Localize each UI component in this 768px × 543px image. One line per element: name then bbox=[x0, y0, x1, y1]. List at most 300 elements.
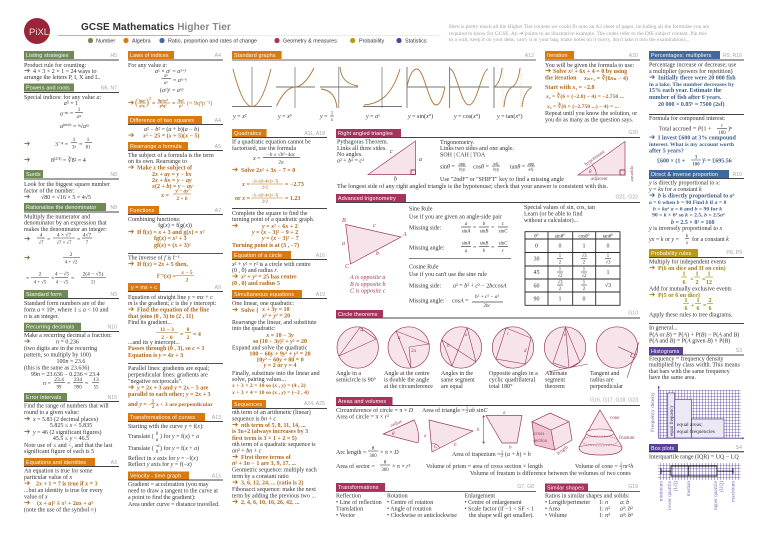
panel: equation of a circle: (0 , 0) and radius 5 bbox=[232, 280, 280, 287]
panel: transformations of curves: 0 bbox=[156, 432, 159, 437]
panel: right angled triangles: Links two sides and one angle. bbox=[440, 146, 514, 152]
panel: transformations: • Line of reflection bbox=[336, 499, 382, 506]
panel: similar shapes: 1: n³ bbox=[599, 513, 610, 519]
panel: equations and identities: Equations and identities bbox=[26, 460, 86, 466]
panel: functions: 2 bbox=[186, 278, 189, 284]
panel: advanced trigonometry: a² = b² + c² − 2bccosA bbox=[453, 284, 507, 290]
graph: y = sin x bbox=[407, 67, 445, 120]
panel: functions: Functions bbox=[130, 208, 155, 214]
title: GCSE Mathematics Higher Tier bbox=[81, 22, 231, 33]
diagram: pythagoras triangle: b bbox=[394, 176, 397, 182]
panel: simultaneous equations: Solve { bbox=[241, 308, 259, 314]
panel: y = mx + c: Equation of straight line y = mx + c bbox=[128, 294, 213, 301]
panel: percentages: Initially there were 20 000 fish bbox=[658, 76, 736, 82]
panel: sequences: first term is 3 × 1 + 2 = 5) bbox=[232, 435, 297, 442]
panel: recurring decimals: 99n = 23.636 − 0.236 = 23.4 bbox=[31, 372, 100, 378]
panel: difference of two squares: a² − b² = (a + b)(a − b) bbox=[144, 126, 199, 133]
panel: iteration: A20 bbox=[629, 53, 638, 59]
panel: powers and roots: Powers and roots bbox=[26, 86, 70, 92]
panel: y = mx + c: that joins (0 , 3) to (2 , 11) bbox=[128, 313, 193, 320]
panel: transformations: Reflection bbox=[336, 492, 361, 500]
panel: areas and volumes: 1 bbox=[501, 450, 503, 454]
panel: transformations of curves bbox=[128, 413, 223, 468]
panel: transformations of curves: ) for y = f(x) + a bbox=[160, 433, 199, 440]
diagram: scalene triangle: C bbox=[345, 264, 350, 270]
panel: iteration: x₂ = ∛(6 × (−2.8) − 4) = −2.750 ... bbox=[545, 92, 625, 100]
panel: advanced trigonometry: sinA bbox=[462, 230, 470, 234]
panel: y = mx + c: m is the gradient; c is the y intercept: bbox=[128, 301, 217, 307]
legend: strands: Geometry & measures bbox=[283, 38, 337, 44]
panel: right angled triangles: adj bbox=[529, 166, 533, 172]
diagram: prism bbox=[532, 413, 572, 457]
table: special trig values: 0 bbox=[535, 244, 538, 250]
panel: probability rules: P(6 on dice and H on coin) bbox=[658, 265, 726, 272]
diagram: scalene triangle: B is opposite b bbox=[350, 282, 386, 288]
panel: probability rules: = bbox=[703, 303, 707, 309]
panel: powers and roots: 1 bbox=[87, 137, 90, 143]
chart: box plot: (UQ) bbox=[718, 481, 725, 492]
panel: equations and identities: (x + a)² ≡ x² + 2ax + a² bbox=[37, 500, 93, 507]
panel: recurring decimals: = bbox=[85, 381, 89, 387]
panel: right angled triangles bbox=[336, 129, 640, 190]
panel: percentages: 20 000 × 0.85⁶ = 7500 (2sf) bbox=[658, 101, 724, 108]
panel: error intervals: Note use of ≤ and <, and that the last bbox=[24, 442, 113, 449]
panel: advanced trigonometry: without a calculator)... bbox=[524, 217, 579, 224]
table: special trig values: 1 bbox=[559, 268, 562, 272]
panel: percentages: £600 × (1 + bbox=[657, 158, 686, 164]
panel: powers and roots bbox=[24, 84, 119, 164]
panel: percentages: r bbox=[721, 124, 723, 129]
panel: rearrange a formula: Make x the subject of bbox=[137, 166, 193, 172]
diagram: angle in semicircle bbox=[336, 327, 378, 384]
legend: strands: Ratio, proportion and rates of change bbox=[168, 38, 257, 44]
diagram: sector: radius bbox=[390, 420, 403, 429]
diagram: scalene triangle: a bbox=[342, 241, 345, 247]
panel: powers and roots: N6, N7 bbox=[101, 86, 117, 92]
panel: functions: If f(x) = 2x + 5 then, bbox=[137, 261, 189, 268]
graph: y = x squared bbox=[232, 67, 272, 120]
panel: y = mx + c: Find its gradient... bbox=[128, 320, 172, 326]
panel: transformations bbox=[336, 483, 536, 519]
panel: circle theorems: Circle theorems bbox=[338, 312, 378, 318]
panel: quadratics: Turning point is at (3 , −7) bbox=[232, 242, 299, 249]
table: special trig values: 1 bbox=[606, 270, 610, 276]
diagram: alternate segment: e bbox=[564, 333, 567, 338]
panel: standard form: form a × 10ⁿ, where 1 ≤ a < 10 and bbox=[24, 306, 108, 314]
panel: equations and identities: ➔ bbox=[24, 478, 30, 488]
panel: similar shapes: Similar shapes bbox=[547, 486, 584, 492]
panel: rearrange a formula: Rearrange a formula bbox=[130, 144, 182, 150]
panel: powers and roots: = 1 bbox=[69, 101, 78, 107]
panel: rationalise the denominator: 2 bbox=[39, 272, 42, 278]
panel: functions: Combining functions: bbox=[128, 216, 181, 223]
panel: percentages: in a lake. The number decreases by bbox=[649, 82, 734, 88]
panel: surds: N8 bbox=[110, 172, 117, 178]
panel: areas and volumes: × π × D bbox=[380, 450, 399, 456]
panel: powers and roots: = ⁿ√ bbox=[71, 123, 84, 130]
panel: transformations: Translation bbox=[336, 506, 363, 512]
panel: simultaneous equations: A19 bbox=[316, 292, 325, 298]
panel: difference of two squares: Difference of two squares bbox=[130, 118, 194, 124]
panel: powers and roots: (m/n) bbox=[63, 123, 72, 127]
panel: transformations of curves: ) for y = f(x + a) bbox=[160, 445, 199, 452]
graph: y = tan x: y = tan(x°) bbox=[496, 113, 522, 120]
panel: areas and volumes: θ bbox=[384, 460, 387, 466]
table: special trig values: 1 bbox=[607, 254, 610, 259]
panel: laws of indices: ➔ bbox=[128, 98, 134, 107]
panel: percentages: 100 bbox=[692, 162, 700, 168]
panel: recurring decimals: n = 0.236 bbox=[56, 340, 79, 346]
panel: simultaneous equations: x = 10 − 3y bbox=[265, 333, 294, 339]
chart: box plot: maximum bbox=[730, 481, 736, 502]
diagram: labelled trig triangle: adjacent bbox=[591, 177, 608, 182]
panel: sequences: an² + bn + c bbox=[232, 448, 262, 454]
panel: laws of indices: ( bbox=[135, 97, 138, 107]
panel: standard form: n is an integer. bbox=[24, 314, 59, 320]
panel: rationalise the denominator: 7 bbox=[86, 241, 89, 246]
diagram: tangent and radius bbox=[590, 327, 639, 390]
diagram: prism: length bbox=[556, 445, 570, 457]
panel: quadratics: factorised, use the formula bbox=[232, 145, 296, 152]
panel: right angled triangles: Use "2ndF" or "SHIFT" key to find a missing angle bbox=[440, 176, 564, 183]
panel: recurring decimals: ➔ bbox=[24, 336, 30, 346]
panel: laws of indices bbox=[128, 51, 223, 108]
panel: direct and inverse proportion: y is inversely proportional to x bbox=[648, 226, 722, 232]
panel: rationalise the denominator: × bbox=[51, 276, 54, 282]
panel: error intervals: ➔ bbox=[24, 427, 30, 436]
panel: quadratics: turning point of a quadratic graph. bbox=[232, 216, 315, 223]
panel: transformations of curves: Starting with the curve y = f(x): bbox=[128, 423, 204, 430]
panel: y = mx + c: 2 bbox=[152, 405, 155, 410]
panel: advanced trigonometry: b² + c² − a² bbox=[475, 294, 499, 300]
panel: y = mx + c: Equation is y = 4x + 3 bbox=[128, 353, 183, 359]
panel: y = mx + c: = 4 bbox=[193, 332, 201, 338]
panel: quadratics: 2×2 bbox=[262, 186, 268, 190]
panel: standard graphs: A12 bbox=[525, 53, 534, 59]
panel: simultaneous equations: x + 3 × 2 = 10 so (x , y) = (4 , 2) bbox=[231, 382, 306, 389]
panel: probability rules: P8, P9 bbox=[726, 250, 742, 256]
panel: percentages: Formula for compound interest: bbox=[649, 115, 726, 122]
panel: rationalise the denominator: Multiply the numerator and bbox=[24, 214, 90, 220]
panel: areas and volumes: 2 bbox=[466, 410, 468, 414]
diagram: pythagoras triangle: a bbox=[419, 157, 422, 163]
panel: similar shapes bbox=[545, 484, 640, 519]
panel: areas and volumes: 2 bbox=[501, 454, 503, 458]
panel: sequences: nth term of a quadratic sequence is bbox=[232, 441, 316, 448]
graph: y = x cubed bbox=[276, 67, 315, 120]
panel: percentages: 100 bbox=[718, 131, 726, 136]
panel: recurring decimals: 13 bbox=[93, 377, 99, 383]
panel: sequences: Sequences bbox=[234, 402, 262, 408]
panel: simultaneous equations: 10y² − 60y + 80 = 0 bbox=[256, 358, 304, 364]
panel: sequences: A24, A25 bbox=[304, 401, 325, 407]
table: special trig values: √2 bbox=[557, 273, 563, 279]
panel: recurring decimals: Make a recurring decimal a fraction: bbox=[24, 332, 112, 339]
panel: rearrange a formula: y − ay bbox=[174, 188, 189, 194]
panel: iteration: Start with x₁ = −2.8 bbox=[545, 85, 594, 91]
panel: advanced trigonometry: = bbox=[473, 246, 477, 252]
panel: right angled triangles: Trigonometry. bbox=[440, 140, 475, 146]
panel: rearrange a formula: on its own. Rearrange to bbox=[128, 159, 187, 165]
panel: areas and volumes: Area of circle = π × r² bbox=[336, 414, 389, 420]
panel: quadratics: −3+√(3²−4×2×−7) bbox=[252, 180, 279, 184]
panel: difference of two squares: A4 bbox=[215, 118, 221, 124]
panel: quadratics: or x = bbox=[235, 196, 251, 202]
panel: y = mx + c: and y = − bbox=[128, 402, 152, 408]
panel: advanced trigonometry: sinA bbox=[462, 242, 470, 246]
panel: areas and volumes: Volume of cone = bbox=[575, 463, 618, 470]
panel: sequences: 3, 6, 12, 24, ... (ratio is 2) bbox=[241, 480, 303, 486]
panel: similar shapes: a: b bbox=[620, 500, 629, 506]
diagram: alternate segment: Alternate bbox=[545, 371, 568, 377]
panel: powers and roots: −m bbox=[63, 110, 69, 115]
diagram: angles in same segment: Angles in the bbox=[441, 371, 473, 377]
panel: areas and volumes: 1 bbox=[466, 406, 468, 410]
panel: histograms: multiplied by class width. This means bbox=[649, 362, 741, 368]
panel: surds: √80 = √16 × 5 = 4√5 bbox=[41, 194, 91, 201]
panel: direct and inverse proportion: ➔ bbox=[649, 190, 655, 200]
panel: quadratics: = −2.73 bbox=[285, 182, 304, 188]
table: special trig values: 1 bbox=[582, 244, 586, 250]
panel: quadratics: y = (x − 3)² − 7 bbox=[261, 235, 299, 242]
panel: laws of indices: 3pq⁴ bbox=[139, 99, 146, 103]
panel: y = mx + c: parallel to each other; y = 2x + 3 bbox=[128, 392, 210, 398]
table: special trig values: 45 bbox=[534, 270, 540, 276]
panel: percentages: Total accrued = P(1 + bbox=[659, 126, 712, 132]
panel: laws of indices: aʸ bbox=[164, 81, 168, 86]
panel: error intervals: significant figure of each is 5 bbox=[24, 448, 94, 455]
panel: rationalise the denominator: = bbox=[71, 276, 75, 282]
panel: functions: fg(x) = f(g(x)) bbox=[158, 222, 192, 229]
panel: quadratics: 2×2 bbox=[262, 200, 268, 204]
panel: listing strategies: arrange the letters P, I, X and L. bbox=[24, 75, 101, 81]
diagram: cone and frustum bbox=[579, 410, 635, 455]
panel: rearrange a formula: x(2 + b) = y − ay bbox=[151, 183, 193, 190]
diagram: cyclic quadrilateral bbox=[489, 327, 538, 390]
panel: iteration: Solve x² + 6x + 4 = 0 by using bbox=[553, 69, 627, 75]
panel: functions: A7 bbox=[215, 208, 221, 214]
panel: similar shapes: • Area bbox=[545, 506, 560, 512]
panel: rationalise the denominator: = bbox=[26, 276, 30, 282]
panel: transformations: G7, G8 bbox=[517, 484, 534, 490]
panel: equation of a circle bbox=[231, 251, 327, 287]
panel: simultaneous equations: Rearrange the linear, and substitute bbox=[232, 320, 317, 326]
panel: transformations: • Centre of rotation bbox=[387, 499, 433, 506]
diagram: scalene triangle: B bbox=[342, 218, 346, 224]
panel: y = mx + c: "negative reciprocals". bbox=[128, 379, 183, 385]
graph: y = x squared: y = x² bbox=[232, 114, 247, 120]
panel: quadratics: ➔ bbox=[232, 165, 238, 174]
panel: powers and roots: (2/3) bbox=[54, 157, 62, 161]
diagram: angles in same segment bbox=[440, 327, 482, 390]
panel: transformations: • Clockwise or anticlockwise bbox=[387, 513, 457, 519]
panel: percentages: 3 bbox=[695, 156, 698, 160]
panel: y = mx + c: Passes through (0 , 3), so c = 3 bbox=[128, 345, 204, 352]
panel: rationalise the denominator: denominator by an expression that bbox=[24, 220, 107, 226]
panel: quadratics: ➔ bbox=[232, 221, 238, 230]
panel: rationalise the denominator: ➔ bbox=[24, 253, 30, 262]
panel: rationalise the denominator: 11 bbox=[91, 280, 96, 286]
chart: box plot: minimum bbox=[658, 481, 664, 501]
panel: areas and volumes: θ bbox=[372, 446, 375, 452]
panel: areas and volumes: 360 bbox=[369, 454, 377, 459]
table: special trig values: 2 bbox=[559, 287, 562, 292]
panel: transformations: • Vector bbox=[336, 513, 355, 519]
legend: strands: Number bbox=[96, 38, 115, 44]
introduction text: to a wall, keep it on your desk, carry it in your bag, make notes on it (sorry, don't take it into the examination)... bbox=[449, 36, 689, 43]
panel: advanced trigonometry: Missing side: bbox=[409, 226, 442, 232]
panel: probability rules: × bbox=[690, 277, 693, 283]
chart: histogram: equal areas; bbox=[677, 422, 703, 428]
panel: histograms: S3 bbox=[736, 348, 742, 354]
panel: rationalise the denominator: √7 × √7 bbox=[56, 240, 72, 246]
panel: sequences: nth term of 5, 8, 11, 14, ... bbox=[241, 423, 306, 429]
panel: rearrange a formula: x = bbox=[160, 193, 170, 199]
graph: y = 1/x: x bbox=[330, 118, 334, 123]
graph: y = 1/x bbox=[319, 67, 358, 123]
panel: advanced trigonometry: b bbox=[483, 249, 486, 254]
diagram: triangle with angle C: b bbox=[454, 443, 457, 448]
table: special trig values: 60 bbox=[534, 284, 540, 290]
panel: sequences: ➔ bbox=[232, 497, 238, 506]
panel: velocity-time graph: Velocity - time graph bbox=[130, 474, 181, 480]
panel: percentages: I invest £600 at 3% compound bbox=[658, 136, 737, 142]
panel: rationalise the denominator: 2 bbox=[70, 252, 73, 258]
panel: laws of indices: p³ bbox=[179, 103, 184, 108]
panel: difference of two squares: x² − 25 = (x + 5)(x − 5) bbox=[142, 132, 199, 140]
diagram: angles in same segment: a bbox=[465, 333, 468, 338]
panel: rearrange a formula: 2 + b bbox=[176, 196, 188, 202]
table: special trig values bbox=[525, 232, 620, 305]
panel: probability rules: = bbox=[702, 277, 706, 283]
panel: laws of indices: = a bbox=[173, 78, 181, 84]
panel: box plots: Interquartile range (IQR) = UQ − LQ bbox=[649, 454, 739, 460]
panel: equations and identities: (note the use of the symbol ≡) bbox=[24, 506, 96, 514]
panel: areas and volumes: Volume of frustum is difference between the volumes of two cones bbox=[470, 470, 631, 477]
panel: similar shapes: • Length/perimeter bbox=[545, 500, 590, 506]
panel: listing strategies: 4 × 3 × 2 × 1 = 24 ways to bbox=[33, 69, 97, 75]
panel: simultaneous equations: x + 3y = 10 bbox=[261, 307, 290, 313]
panel: histograms: Frequency = frequency density bbox=[649, 356, 724, 362]
panel: transformations: Transformations bbox=[338, 485, 379, 491]
panel: areas and volumes: × π × r² bbox=[392, 464, 411, 470]
chart: box plot: upper quartile bbox=[713, 480, 719, 510]
panel: box plots bbox=[649, 444, 744, 510]
panel: listing strategies: H5 bbox=[110, 53, 117, 59]
table: special trig values: 1 bbox=[583, 280, 586, 286]
panel: advanced trigonometry bbox=[336, 194, 640, 309]
panel: advanced trigonometry: sinC bbox=[499, 230, 508, 234]
panel: powers and roots: = bbox=[79, 142, 83, 148]
panel: rationalise the denominator: 2(4 − √5) bbox=[83, 270, 104, 278]
panel: transformations: Rotation bbox=[387, 494, 408, 500]
panel: error intervals: y = 46 (2 significant figures) bbox=[32, 429, 102, 436]
panel: advanced trigonometry: = bbox=[491, 226, 495, 232]
panel: areas and volumes: Area of sector = bbox=[336, 463, 375, 470]
panel: powers and roots: aᵐ bbox=[83, 124, 89, 130]
panel: error intervals: round to a given value: bbox=[24, 410, 80, 416]
panel: equations and identities: 2x + 1 = 7 is true if x = 3 bbox=[36, 482, 98, 488]
panel: direct and inverse proportion: k bbox=[686, 234, 689, 239]
panel: direct and inverse proportion: a = 6 when b = 90 Find b if a = 8 bbox=[649, 200, 727, 206]
panel: iteration bbox=[545, 51, 640, 124]
panel: percentages: R9, R16 bbox=[723, 53, 742, 59]
panel: rearrange a formula: 2x + bx = y − ay bbox=[152, 178, 192, 184]
panel: advanced trigonometry: c bbox=[502, 249, 505, 254]
panel: equation of a circle: A16 bbox=[316, 253, 325, 259]
panel: right angled triangles: opp bbox=[528, 161, 534, 166]
panel: laws of indices: 9p³q¹² bbox=[158, 98, 169, 103]
panel: surds: Look for the biggest square number bbox=[24, 181, 110, 188]
panel: sequences: First three terms of bbox=[241, 455, 292, 461]
table: special trig values: 2 bbox=[583, 287, 586, 292]
panel: y = mx + c: perpendicular lines: gradients are bbox=[128, 372, 208, 378]
table: special trig values: 1 bbox=[558, 296, 562, 302]
panel: direct and inverse proportion: y is directly proportional to x: bbox=[648, 180, 720, 186]
panel: powers and roots: 3⁻⁴ = bbox=[55, 142, 69, 148]
chart: histogram: equal frequency bbox=[670, 405, 675, 436]
panel: direct and inverse proportion: y = kx for a constant k bbox=[648, 186, 702, 193]
diagram: trapezium bbox=[477, 411, 522, 450]
panel: sequences: term by a constant ratio bbox=[232, 474, 289, 480]
panel: probability rules: 6 bbox=[708, 306, 712, 312]
panel: functions: fg(x) = x² + 3 bbox=[154, 235, 187, 242]
panel: transformations of curves: −a bbox=[154, 444, 160, 449]
panel: y = mx + c: y = 2x + 3 and y = 2x − 5 are bbox=[136, 386, 209, 392]
diagram: triangle with angle C: C bbox=[434, 445, 438, 450]
panel: sequences bbox=[232, 400, 327, 506]
graph: y = cos x bbox=[450, 67, 489, 120]
panel: error intervals: Error intervals bbox=[26, 395, 62, 401]
panel: rearrange a formula: ➔ bbox=[128, 162, 134, 172]
table: special trig values: 0 bbox=[606, 244, 610, 250]
panel: probability rules: 1 bbox=[708, 272, 710, 278]
panel: laws of indices: x+y bbox=[180, 68, 187, 72]
panel: histograms: have the same area. bbox=[649, 375, 696, 381]
panel: box plots: Box plots bbox=[651, 446, 674, 452]
panel: velocity-time graph: A15 bbox=[212, 474, 221, 480]
panel: iteration: Iteration bbox=[547, 53, 568, 59]
panel: powers and roots: ➔ bbox=[24, 139, 30, 148]
table: special trig values: sinθ° bbox=[555, 234, 565, 240]
table: special trig values: tanθ° bbox=[603, 234, 613, 240]
graph: y = x cubed: y = x³ bbox=[277, 114, 292, 120]
panel: areas and volumes: Area of triangle = bbox=[422, 407, 465, 414]
panel: laws of indices: = bbox=[152, 101, 156, 107]
panel: quadratics: If a quadratic equation cannot be bbox=[232, 138, 311, 146]
diagram: angle in semicircle: Angle in a bbox=[336, 371, 361, 377]
panel: equation of a circle: x² + y² = 25 has centre bbox=[240, 274, 297, 280]
panel: listing strategies: Listing strategies bbox=[26, 53, 69, 59]
panel: advanced trigonometry: c bbox=[502, 221, 505, 227]
table: special trig values: 2 bbox=[559, 260, 562, 266]
panel: simultaneous equations: so (10 − 3y)² + y² = 20 bbox=[253, 338, 307, 345]
panel: equation of a circle: x² + y² = r² is a circle with centre bbox=[231, 262, 311, 268]
panel: areas and volumes: Areas and volumes bbox=[338, 399, 386, 405]
panel: similar shapes: 1: n² bbox=[599, 506, 610, 512]
graph: y = tan x bbox=[494, 67, 532, 120]
panel: recurring decimals: = bbox=[67, 381, 71, 387]
diagram: labelled trig triangle bbox=[578, 142, 635, 182]
panel: powers and roots: 3⁴ bbox=[72, 144, 76, 150]
panel: sequences: Fibonacci sequence: make the next bbox=[232, 487, 316, 493]
panel: direct and inverse proportion: Direct & inverse proportion bbox=[651, 172, 718, 178]
panel: right angled triangles: hyp bbox=[493, 166, 499, 172]
panel: velocity-time graph bbox=[128, 472, 223, 508]
diagram: trapezium: b bbox=[509, 446, 512, 450]
panel: powers and roots: 0 bbox=[67, 100, 69, 104]
panel: quadratics: x = bbox=[241, 182, 250, 188]
